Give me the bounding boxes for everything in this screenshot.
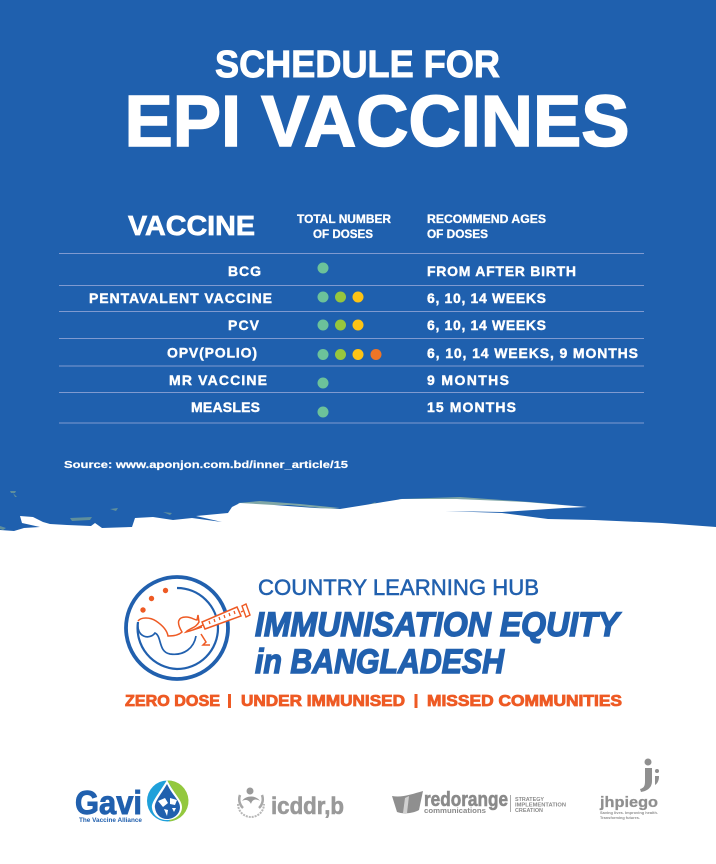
tagline	[125, 693, 622, 710]
logo: redorange communications	[392, 789, 566, 815]
row: Measles: MEASLES	[191, 399, 260, 415]
logo: redorange communications: redorange	[424, 789, 508, 811]
row: PCV: 6, 10, 14 WEEKS	[427, 317, 546, 333]
logo: jhpiego: Saving lives. Improving health.	[600, 811, 658, 815]
white brush-edged lower panel	[0, 499, 716, 864]
row: OPV (Polio)	[167, 344, 638, 361]
row: BCG: FROM AFTER BIRTH	[427, 263, 576, 279]
row: MR vaccine	[169, 372, 509, 388]
logo: Gavi: Gavi	[75, 784, 142, 821]
hub heading: IMMUNISATION EQUITY	[255, 606, 622, 644]
tagline: UNDER IMMUNISED	[241, 693, 405, 710]
logo: redorange communications: IMPLEMENTATION	[515, 802, 566, 808]
row: Pentavalent vaccine	[89, 290, 546, 306]
brush specks	[0, 491, 565, 530]
tagline: ZERO DOSE	[125, 693, 220, 710]
logo: jhpiego	[599, 758, 659, 820]
logo: icddr,b: icddr,b	[271, 793, 344, 820]
source note: Source: www.aponjon.com.bd/inner_article/15	[64, 459, 348, 471]
icon: baby vaccination emblem	[126, 577, 250, 679]
row: Measles	[191, 399, 516, 418]
row: OPV (Polio): OPV(POLIO)	[167, 344, 257, 360]
column heading: total number of doses: TOTAL NUMBER	[297, 212, 391, 226]
logo: jhpiego: jhpiego	[599, 794, 658, 811]
row: MR vaccine: MR VACCINE	[169, 372, 267, 388]
blue header background	[0, 0, 716, 540]
tagline: MISSED COMMUNITIES	[427, 693, 622, 710]
logo: Gavi	[75, 780, 189, 824]
logo: redorange communications: STRATEGY	[515, 797, 544, 803]
row: Pentavalent vaccine: 6, 10, 14 WEEKS	[427, 290, 546, 306]
logo: icddr,b	[238, 788, 344, 820]
title: SCHEDULE FOR	[215, 44, 500, 86]
row: BCG	[228, 262, 576, 279]
hub heading	[255, 575, 622, 681]
title	[124, 44, 630, 162]
column heading: recommended ages	[427, 212, 546, 241]
row: PCV	[228, 317, 546, 333]
row: Pentavalent vaccine: PENTAVALENT VACCINE	[89, 290, 272, 306]
column heading: vaccine: VACCINE	[128, 210, 255, 241]
column heading: recommended ages: OF DOSES	[427, 227, 488, 241]
row: BCG: BCG	[228, 263, 261, 279]
row: PCV: PCV	[228, 317, 260, 333]
logo: redorange communications: CREATION	[515, 808, 543, 814]
row: OPV (Polio): 6, 10, 14 WEEKS, 9 MONTHS	[427, 345, 638, 361]
column heading: total number of doses	[297, 212, 391, 241]
row: Measles: 15 MONTHS	[427, 399, 516, 415]
column heading: total number of doses: OF DOSES	[313, 227, 373, 241]
table	[59, 210, 644, 423]
logo: redorange communications: communications	[424, 806, 486, 815]
hub heading: COUNTRY LEARNING HUB	[258, 575, 539, 600]
logo: jhpiego: Transforming futures.	[600, 816, 640, 820]
column heading: recommended ages: RECOMMEND AGES	[427, 212, 546, 226]
logo: Gavi: The Vaccine Alliance	[79, 817, 142, 824]
hub heading: in BANGLADESH	[255, 643, 505, 681]
row: MR vaccine: 9 MONTHS	[427, 372, 509, 388]
title: EPI VACCINES	[124, 81, 630, 162]
